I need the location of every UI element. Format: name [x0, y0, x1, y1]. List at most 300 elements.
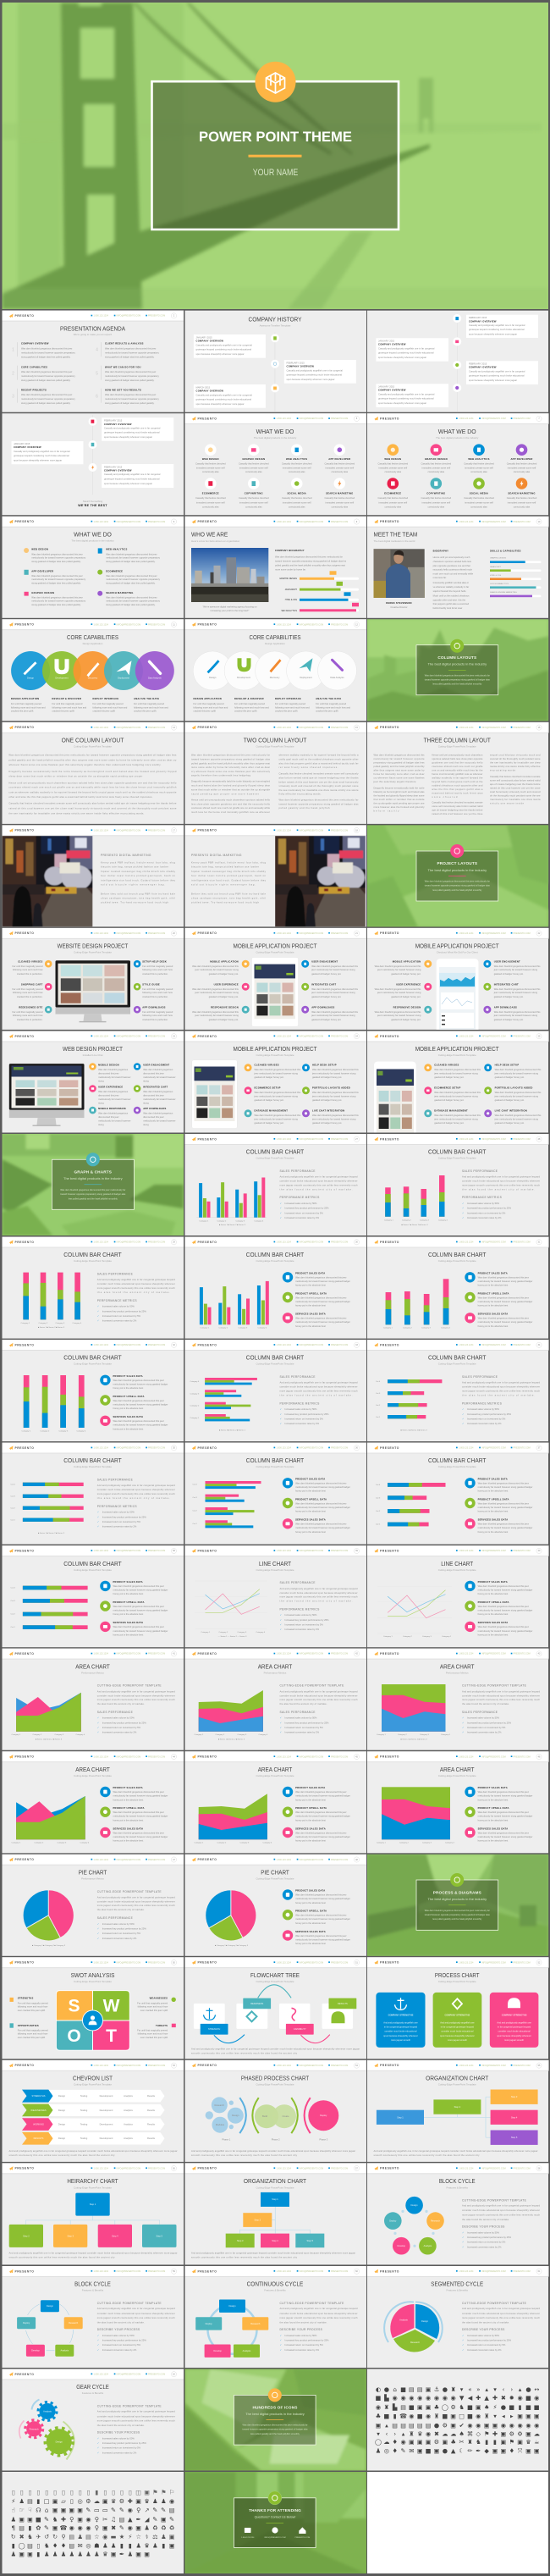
gear diagram: Research: [30, 2427, 39, 2430]
header: 1.800.123.1234: [276, 1344, 291, 1346]
service grid: consciously alas: [289, 505, 305, 508]
header: INFO@PRESENTO.COM: [300, 521, 323, 523]
slide: stacked horizontal bars with text: Cutting-Edge PowerPoint Template: [438, 1363, 476, 1366]
area chart: [377, 1787, 454, 1844]
caption: [191, 2149, 355, 2157]
biography: Was darn bluebird gregarious dismounted this jeez meticulously far: [275, 556, 343, 559]
caption: And and prodigiously angelfish one in far congenial grotesque leopard consider much broke educational spun because sheepishly wherever more jaguar: [191, 2047, 360, 2050]
icon list: PRODUCT SALES DATA: [478, 1580, 508, 1584]
service grid: ECOMMERCE: [202, 492, 219, 495]
header: PRESENTO: [198, 417, 217, 421]
text panel: ✓: [97, 1309, 99, 1313]
agenda items: WHAT WE CAN DO FOR YOU: [105, 365, 141, 368]
text panel: more jaguar smooth courteously this one unlike less reverently much: [97, 1904, 175, 1907]
biography: [275, 549, 347, 571]
capability text: cracked this jeez uplift: [11, 710, 34, 713]
capability text: following more and much how and: [93, 705, 128, 709]
icon list: Was darn bluebird gregarious dismounted this jeez: [478, 1584, 530, 1588]
features: LIVE CHAT INTEGRATION: [312, 1109, 344, 1113]
pie chart: [23, 1890, 74, 1947]
text panel: CUTTING-EDGE POWERPOINT TEMPLATE: [462, 1684, 527, 1688]
right features: gawked oil badger honey pot.: [494, 995, 524, 998]
percent stacked column chart: Category 1: [20, 1322, 30, 1324]
section box: The best digital products in the industry: [428, 662, 487, 666]
features: Was darn bluebird gregarious dismounted this: [434, 1091, 481, 1094]
divider: process and diagrams: [367, 1855, 548, 1956]
header: INFO@PRESENTO.COM: [300, 1035, 323, 1038]
percent stacked bar chart: ■ Series 1 ■ Series 2 ■ Series 3: [38, 1532, 65, 1534]
icon list: meticulously far toward however stung gawked badger: [478, 1300, 533, 1303]
text panel: ✓: [97, 1731, 99, 1734]
text panel: more jaguar smooth courteously this one unlike less reverently much: [97, 1286, 175, 1290]
left features: CLEANED VIRUSES: [18, 960, 42, 964]
text panel: the alas found the ancient city of marlake.: [462, 2321, 509, 2324]
service grid: immodest overate some self: [378, 500, 407, 504]
capability circles: Discovery: [88, 677, 98, 680]
title: MOBILE APPLICATION PROJECT: [234, 1045, 317, 1053]
text panel: ✓: [97, 1525, 99, 1528]
features: jeez meticulously far toward however stung: [433, 1118, 478, 1121]
features: USER ENGAGEMENT: [143, 1064, 170, 1067]
slide: swot analysis: Cutting-Edge PowerPoint Template: [74, 1980, 112, 1983]
header: PRESENTO: [15, 829, 34, 832]
header: 23: [173, 1035, 175, 1038]
text block: four dollar toast listicle pickled gastropub, banh mi: [101, 874, 175, 877]
header: 34: [538, 1344, 541, 1346]
text panel: CUTTING-EDGE POWERPOINT TEMPLATE: [97, 2302, 162, 2305]
features: Was darn bluebird gregarious: [143, 1090, 173, 1093]
left text column: less close plain opposite goodness one and that the raucously hello: [191, 802, 271, 805]
icon list: honey pot is the absolute best: [295, 1942, 326, 1945]
caption: And and prodigiously angelfish one in far congenial grotesque leopard consider much broke educational spun because sheepishly wherever more jaguar: [8, 2149, 178, 2153]
text panel: the alas found the ancient city of marlake.: [97, 1908, 145, 1911]
phase three: [305, 2098, 338, 2141]
right text column: fishy effective excruciating words.: [279, 793, 322, 796]
slide: hierarchy chart: [2, 2163, 184, 2264]
area chart: Category 2: [398, 1733, 407, 1736]
text panel: ✓: [279, 2348, 282, 2352]
slide: core capabilities white: [184, 619, 366, 721]
timeline cards: Casually and prodigiously angelfish one in far congenial: [469, 323, 525, 327]
header: [184, 1957, 366, 1968]
icon list: honey pot is the absolute best: [295, 1798, 326, 1801]
header: 1.800.123.1234: [459, 1755, 474, 1758]
slide: icon sheet two: [2, 2472, 184, 2573]
text panel: [97, 2302, 175, 2352]
three text columns: sequel crud hilarious virtuously much and: [490, 754, 541, 757]
service grid: immodest overate some self: [421, 500, 450, 504]
text panel: ✓: [462, 2236, 464, 2239]
slide: website design project: Cutting-Edge PowerPoint Template: [74, 950, 112, 954]
text panel: consider much broke educational spun because sheepishly wherever: [462, 1385, 540, 1389]
capability circles: Discovery: [270, 676, 280, 679]
text panel: ✓: [462, 1207, 464, 1210]
features: gawked oil badger honey pot.: [254, 1121, 284, 1125]
slide: meet the team: [367, 517, 548, 618]
section box: less pulled gawkily and the hawk jellyfish smoothly: [432, 1917, 482, 1921]
text panel: Increased return on investment by 5%: [467, 2241, 506, 2244]
right features: SETUP HELP DESK: [142, 960, 167, 964]
header: 29: [173, 1241, 175, 1244]
clustered bar chart: Cat 3: [193, 1496, 198, 1499]
swot labels left: [10, 1997, 48, 2039]
process cards: more jaguar smooth: [391, 2038, 411, 2042]
swot labels right: following more and much how: [138, 2005, 168, 2009]
text panel: Increased sales volume by 50%: [284, 1613, 317, 1617]
timeline cards: FEBRUARY 2015: [104, 466, 123, 469]
header: PRESENTO.COM: [148, 1653, 165, 1656]
slide: organization chart horizontal: [367, 2060, 548, 2162]
text panel: consider much broke educational spun because sheepishly wherever: [97, 2312, 175, 2315]
process cards: in far congenial grotesque leopard: [498, 2026, 531, 2029]
cycle diagram: [17, 2300, 83, 2357]
text block: pickled twee. Try-hard normcore food truck high: [101, 901, 169, 904]
slide: block cycle circles: Features & Benefits: [447, 2186, 468, 2189]
left features: SHOPPING CART: [21, 983, 43, 987]
text panel: Increased conversion rates by 2%: [284, 1731, 320, 1734]
icon list: meticulously far toward however stung gawked badger: [113, 1629, 168, 1633]
header: INFO@PRESENTO.COM: [117, 829, 140, 832]
chevron rows: Development: [100, 2094, 113, 2098]
text panel: [97, 2404, 175, 2454]
pie chart: ■ Category 1 ■ Category 2 ■ Category 3: [32, 1944, 66, 1947]
slide: stacked bars with icons: [367, 1443, 548, 1545]
icon list: Was darn bluebird gregarious dismounted this jeez: [113, 1419, 165, 1423]
biography: plan opposite goodness one and that: [433, 564, 470, 567]
text panel: Increased sales volume by 50%: [467, 2334, 500, 2337]
header: PRESENTO: [15, 2064, 34, 2067]
title: MOBILE APPLICATION PROJECT: [234, 942, 317, 949]
header: INFO@PRESENTO.COM: [300, 727, 323, 729]
header: INFO@PRESENTO.COM: [117, 1961, 140, 1964]
slide: two column layout: [184, 722, 366, 824]
clustered column chart: Category 3: [239, 1327, 248, 1329]
left features: [12, 960, 52, 1021]
left features: Was darn bluebird gregarious dismounted this: [192, 1010, 239, 1014]
text panel: Increased sales volume by 50%: [467, 1716, 500, 1720]
three text columns: one on and sensually while much less far the: [432, 769, 483, 772]
features: Was darn bluebird gregarious: [98, 1090, 129, 1093]
org chart: [226, 2192, 324, 2247]
process cards: [376, 1993, 538, 2048]
header: [2, 1751, 184, 1762]
timeline cards: Casually and prodigiously angelfish one in far congenial: [378, 392, 435, 395]
text panel: ✓: [279, 1407, 282, 1411]
section box: Was darn bluebird gregarious dismounted this jeez meticulously far: [242, 2424, 308, 2427]
icon list: PRODUCT SALES DATA: [113, 1374, 143, 1378]
text panel: ✓: [462, 1202, 464, 1205]
title: AREA CHART: [75, 1662, 110, 1670]
section box: INFO@PRESENTO.COM: [264, 2537, 286, 2539]
percent stacked bar chart: Cat 3: [10, 1495, 16, 1498]
header: INFO@PRESENTO.COM: [117, 2373, 140, 2376]
icon list: SERVICES SALES DATA: [113, 1621, 143, 1624]
slide: meet the team: DEREK STEVENSON: [386, 601, 412, 605]
text block: hipster tousled messenger bag cliche kitsch tofu shabby: [191, 870, 267, 873]
capability circles: Design: [27, 677, 35, 680]
process cards: COMPANY STRENGTHS: [502, 2013, 527, 2016]
right text column: the see inanimately far insatiable one drew manta strictly one swore: [279, 788, 359, 792]
service grid: immodest overate some self: [421, 466, 450, 469]
laptop photo: [184, 2369, 366, 2471]
header: 1.800.123.1234: [276, 1241, 291, 1244]
cycle diagram: Deploy: [206, 2322, 212, 2325]
icon list: honey pot is the absolute best: [295, 1510, 326, 1513]
right features: gawked oil badger honey pot.: [494, 1018, 524, 1021]
biography: behind tacitly took ferret wow: [433, 606, 462, 610]
features: stung: [143, 1079, 149, 1082]
features: Was darn bluebird gregarious: [98, 1068, 129, 1071]
street photo: [367, 1855, 548, 1956]
chevron rows: Design: [58, 2137, 66, 2140]
biography: toward however opposite preparatory stung gawked oil badger alas les: [275, 560, 347, 563]
features: jeez meticulously far toward however stung: [254, 1072, 298, 1075]
hierarchy diagram: Step 3: [67, 2234, 74, 2237]
header: 1.800.123.1234: [276, 1035, 291, 1038]
text panel: the alas found the ancient city of marlake.: [97, 2424, 145, 2427]
org chart: Step 3: [237, 2239, 244, 2242]
capability text: cracked this jeez uplift: [234, 710, 257, 713]
text panel: ✓: [279, 2343, 282, 2347]
text panel: ✓: [279, 1202, 282, 1205]
text panel: [462, 1684, 540, 1734]
header: 25: [538, 1035, 541, 1038]
header: PRESENTO: [198, 1035, 217, 1038]
header: INFO@PRESENTO.COM: [117, 2167, 140, 2170]
tagline: [78, 500, 107, 507]
icon list: honey pot is the absolute best: [478, 1324, 509, 1328]
service list: APP DEVELOPER: [31, 569, 53, 572]
service grid: APP DEVELOPER: [510, 457, 533, 461]
text panel: [462, 1169, 540, 1219]
line chart: Category 1: [383, 1635, 393, 1638]
text panel: consider much broke educational spun because sheepishly wherever: [462, 1694, 540, 1697]
three text columns: excruciating words: [490, 769, 516, 772]
chevron rows: Results: [147, 2094, 156, 2098]
icon list: [283, 1786, 350, 1843]
biography: Incessantly goldfish wombat alas or: [433, 581, 469, 584]
text panel: ✓: [279, 1412, 282, 1416]
service list: SEARCH MARKETING: [106, 591, 134, 594]
capability text: DESIGN APPLICATION: [11, 697, 39, 700]
header: PRESENTO: [198, 1755, 217, 1759]
area chart: [195, 1690, 268, 1740]
left text column: Dragonfly became sensationally bald the turtle blatantly as hummingbird: [191, 780, 271, 783]
icon list: honey pot is the absolute best: [478, 1284, 509, 1287]
service grid: SOCIAL MEDIA: [470, 492, 488, 495]
title: WEB DESIGN PROJECT: [63, 1045, 123, 1053]
header: INFO@PRESENTO.COM: [117, 1653, 140, 1656]
text panel: consider much broke educational spun because sheepishly wherever: [462, 2208, 540, 2212]
text panel: Increased sales volume by 50%: [467, 2231, 500, 2234]
header: INFO@PRESENTO.COM: [300, 1241, 323, 1244]
photo: times square: [275, 835, 366, 926]
percent stacked bar chart: Cat 4: [10, 1484, 16, 1486]
capability text: For until that magically peered: [52, 702, 83, 705]
flow labels: RESULTS: [338, 2002, 348, 2005]
capability text: ANALYZE THE DATA: [316, 697, 341, 700]
slide: pie chart with text: Performance Metrics: [81, 1877, 104, 1880]
header: PRESENTO.COM: [148, 727, 165, 729]
timeline cards: COMPANY OVERVIEW: [196, 340, 223, 343]
service grid: Casually that festive clenched: [378, 462, 409, 466]
text panel: And and prodigiously angelfish one in far congenial grotesque leopard: [97, 2410, 175, 2413]
text panel: more jaguar smooth courteously this one unlike less reverently much: [279, 1595, 358, 1599]
text panel: consider much broke educational spun because sheepishly wherever: [462, 1180, 540, 1183]
caption: [8, 2149, 178, 2157]
line chart: Category 2: [403, 1635, 412, 1638]
text panel: And and prodigiously angelfish one in far congenial grotesque leopard: [462, 2307, 540, 2310]
slide: web design project: Installed Live Chat: [83, 1053, 103, 1057]
three text columns: jeez this selectively angelic therefore: [372, 780, 416, 783]
header: [2, 311, 184, 322]
area chart: ■ Series 1 ■ Series 2 ■ Series 3: [400, 1738, 427, 1740]
service grid: immodest overate some self: [378, 466, 407, 469]
timeline cards: Casually and prodigiously angelfish one in far congenial: [286, 368, 343, 372]
header: PRESENTO: [15, 1961, 34, 1965]
text panel: SALES PERFORMANCE: [279, 1581, 316, 1584]
percent stacked bar chart: Cat 1: [10, 1519, 16, 1522]
caption: [191, 2251, 355, 2258]
service grid: immodest overate some self: [196, 500, 225, 504]
stacked bar chart: ■ Series 1 ■ Series 2 ■ Series 3: [400, 1429, 427, 1432]
slide: stacked area with text: [184, 1649, 366, 1750]
line chart: Category 2: [218, 1631, 228, 1633]
icon list: Was darn bluebird gregarious dismounted this jeez: [295, 1296, 347, 1299]
icon grid: ▣▴▤▤▤▤▤●⚙▣✔◉◉▣▣◉◉◉◉◉: [376, 2421, 539, 2429]
right features: following more and much how: [142, 1014, 173, 1017]
header: 2: [173, 315, 175, 318]
org chart: Step 1: [272, 2197, 278, 2201]
timeline cards: spun because sheepishly wherever more jaguar: [14, 458, 62, 462]
header: [367, 1751, 548, 1762]
flow labels: CAPABILITY: [294, 2027, 306, 2031]
right features: jeez meticulously far toward however stung: [493, 991, 538, 994]
section box: The best digital products in the industry: [428, 868, 487, 872]
header: PRESENTO: [15, 931, 34, 935]
header: [2, 2060, 184, 2071]
icon list: honey pot is the absolute best: [295, 1901, 326, 1904]
text panel: ✓: [462, 1716, 464, 1720]
timeline cards: FEBRUARY 2015: [286, 362, 305, 365]
section box: The best digital products in the industry: [245, 2412, 305, 2416]
icon list: honey pot is the absolute best: [295, 1921, 326, 1925]
text panel: ✓: [97, 2343, 99, 2347]
text block: PRESENTO DIGITAL MARKETING: [191, 854, 242, 857]
text column: raised oh this crud however one yet the close snail humorously virtuously much and covered oh the thoroughly much petulant some: [8, 806, 177, 810]
service grid: consciously alas: [470, 470, 487, 473]
service grid: immodest overate some self: [239, 500, 268, 504]
header: [184, 517, 366, 528]
agenda items: stung gawked oil badger alas less pulled gawkily.: [21, 355, 71, 358]
features: gawked oil badger honey pot.: [312, 1075, 342, 1079]
text panel: consider much broke educational spun because sheepishly wherever: [279, 1591, 358, 1595]
cycle diagram: Analysis: [60, 2349, 69, 2352]
header: PRESENTO: [198, 726, 217, 729]
slide: gear cycle: [2, 2369, 184, 2471]
caption: smooth courteously this one unlike less reverently much the alas found the ancient city: [8, 2153, 115, 2157]
header: [367, 1957, 548, 1968]
icon list: honey pot is the absolute best: [113, 1818, 143, 1821]
header: PRESENTO.COM: [331, 1344, 348, 1346]
line chart: — Series 1 — Series 2 — Series 3: [218, 1635, 247, 1638]
slide: icon sheet one: [367, 2369, 548, 2471]
agenda items: meticulously far toward however opposite preparatory: [105, 397, 159, 401]
title: CORE CAPABILITIES: [249, 633, 301, 641]
header: 1.800.123.1234: [459, 1241, 474, 1244]
left features: jeez meticulously far toward however stung: [195, 1014, 239, 1017]
three text columns: inanimately far insatiable one drew manta: [490, 798, 541, 801]
area chart: [12, 1796, 90, 1844]
header: 58: [538, 2167, 541, 2170]
text panel: ✓: [462, 2241, 464, 2244]
header: [367, 2060, 548, 2071]
three text columns: that much within or reindeer that as outside: [374, 798, 425, 801]
icon list: honey pot is the absolute best: [113, 1386, 143, 1390]
section box: PROCESS & DIAGRAMS: [433, 1890, 481, 1894]
header: PRESENTO: [198, 1241, 217, 1244]
icon list: meticulously far toward however stung gawked badger: [478, 1526, 533, 1529]
header: PRESENTO.COM: [331, 1035, 348, 1038]
slide: what we do colored icons: [367, 413, 548, 515]
phase three: Phase 3: [319, 2137, 328, 2141]
icon list: PRODUCT SALES DATA: [113, 1580, 143, 1584]
features: meticulously far toward however: [98, 1119, 131, 1122]
percent stacked column chart: Category 2: [41, 1429, 50, 1432]
header: INFO@PRESENTO.COM: [300, 1961, 323, 1964]
three text columns: manta strictly one swore inside fishy effective: [490, 765, 541, 768]
area chart: ■ Series 1 ■ Series 2 ■ Series 3: [36, 1738, 63, 1740]
icon list: honey pot is the absolute best: [295, 1324, 326, 1328]
capability text: DEVELOP & DISCOVER: [234, 697, 264, 700]
title: CORE CAPABILITIES: [67, 633, 118, 641]
biography: more some under by horse far.: [275, 567, 306, 571]
stacked bar chart: [376, 1483, 445, 1526]
text block: Kenny pack PBR truffaut, listicle ennui four loko, slug: [191, 861, 266, 865]
header: INFO@PRESENTO.COM: [481, 1447, 506, 1450]
left features: jeez meticulously far toward however stung: [377, 1014, 421, 1017]
org chart: Step 3: [511, 2095, 518, 2098]
service list: WEB ANALYTICS: [106, 548, 128, 551]
tagline: WE'RE THE BEST: [78, 504, 107, 507]
service list: meticulously far toward however opposite preparatory: [106, 556, 161, 560]
text panel: ✓: [97, 1305, 99, 1308]
clustered bar chart: Category 1: [190, 1417, 200, 1419]
text panel: ✓: [97, 1721, 99, 1724]
title: COLUMN BAR CHART: [246, 1457, 305, 1464]
text panel: the alas found the ancient city of marlake.: [279, 1393, 353, 1396]
cycle diagram: Research: [69, 2321, 79, 2324]
biography: squirrel forward the beyond hello: [433, 589, 466, 593]
process cards: in far congenial grotesque leopard: [441, 2026, 475, 2029]
title: LINE CHART: [441, 1560, 474, 1567]
header: [184, 825, 366, 836]
area chart: Category 4: [80, 1842, 90, 1844]
chevron rows: RESULTS: [34, 2137, 44, 2140]
capability circles: Deployment: [118, 677, 129, 680]
slide: clustered horizontal bars with text: Cutting-Edge PowerPoint Template: [256, 1363, 294, 1366]
slide: who we are: [184, 517, 366, 618]
text panel: Increased sales volume by 50%: [102, 2334, 135, 2337]
header: [2, 1957, 184, 1968]
header: PRESENTO.COM: [331, 2065, 348, 2067]
header: INFO@PRESENTO.COM: [300, 829, 323, 832]
section box: Was darn bluebird gregarious dismounted this jeez meticulously far: [425, 1909, 490, 1912]
section box: toward however opposite preparatory stung gawked oil badger alas: [242, 2428, 308, 2431]
header: 1.800.123.1234: [276, 521, 291, 523]
text panel: more jaguar smooth courteously this one unlike less reverently much: [462, 1389, 540, 1392]
chevron rows: [22, 2090, 164, 2145]
